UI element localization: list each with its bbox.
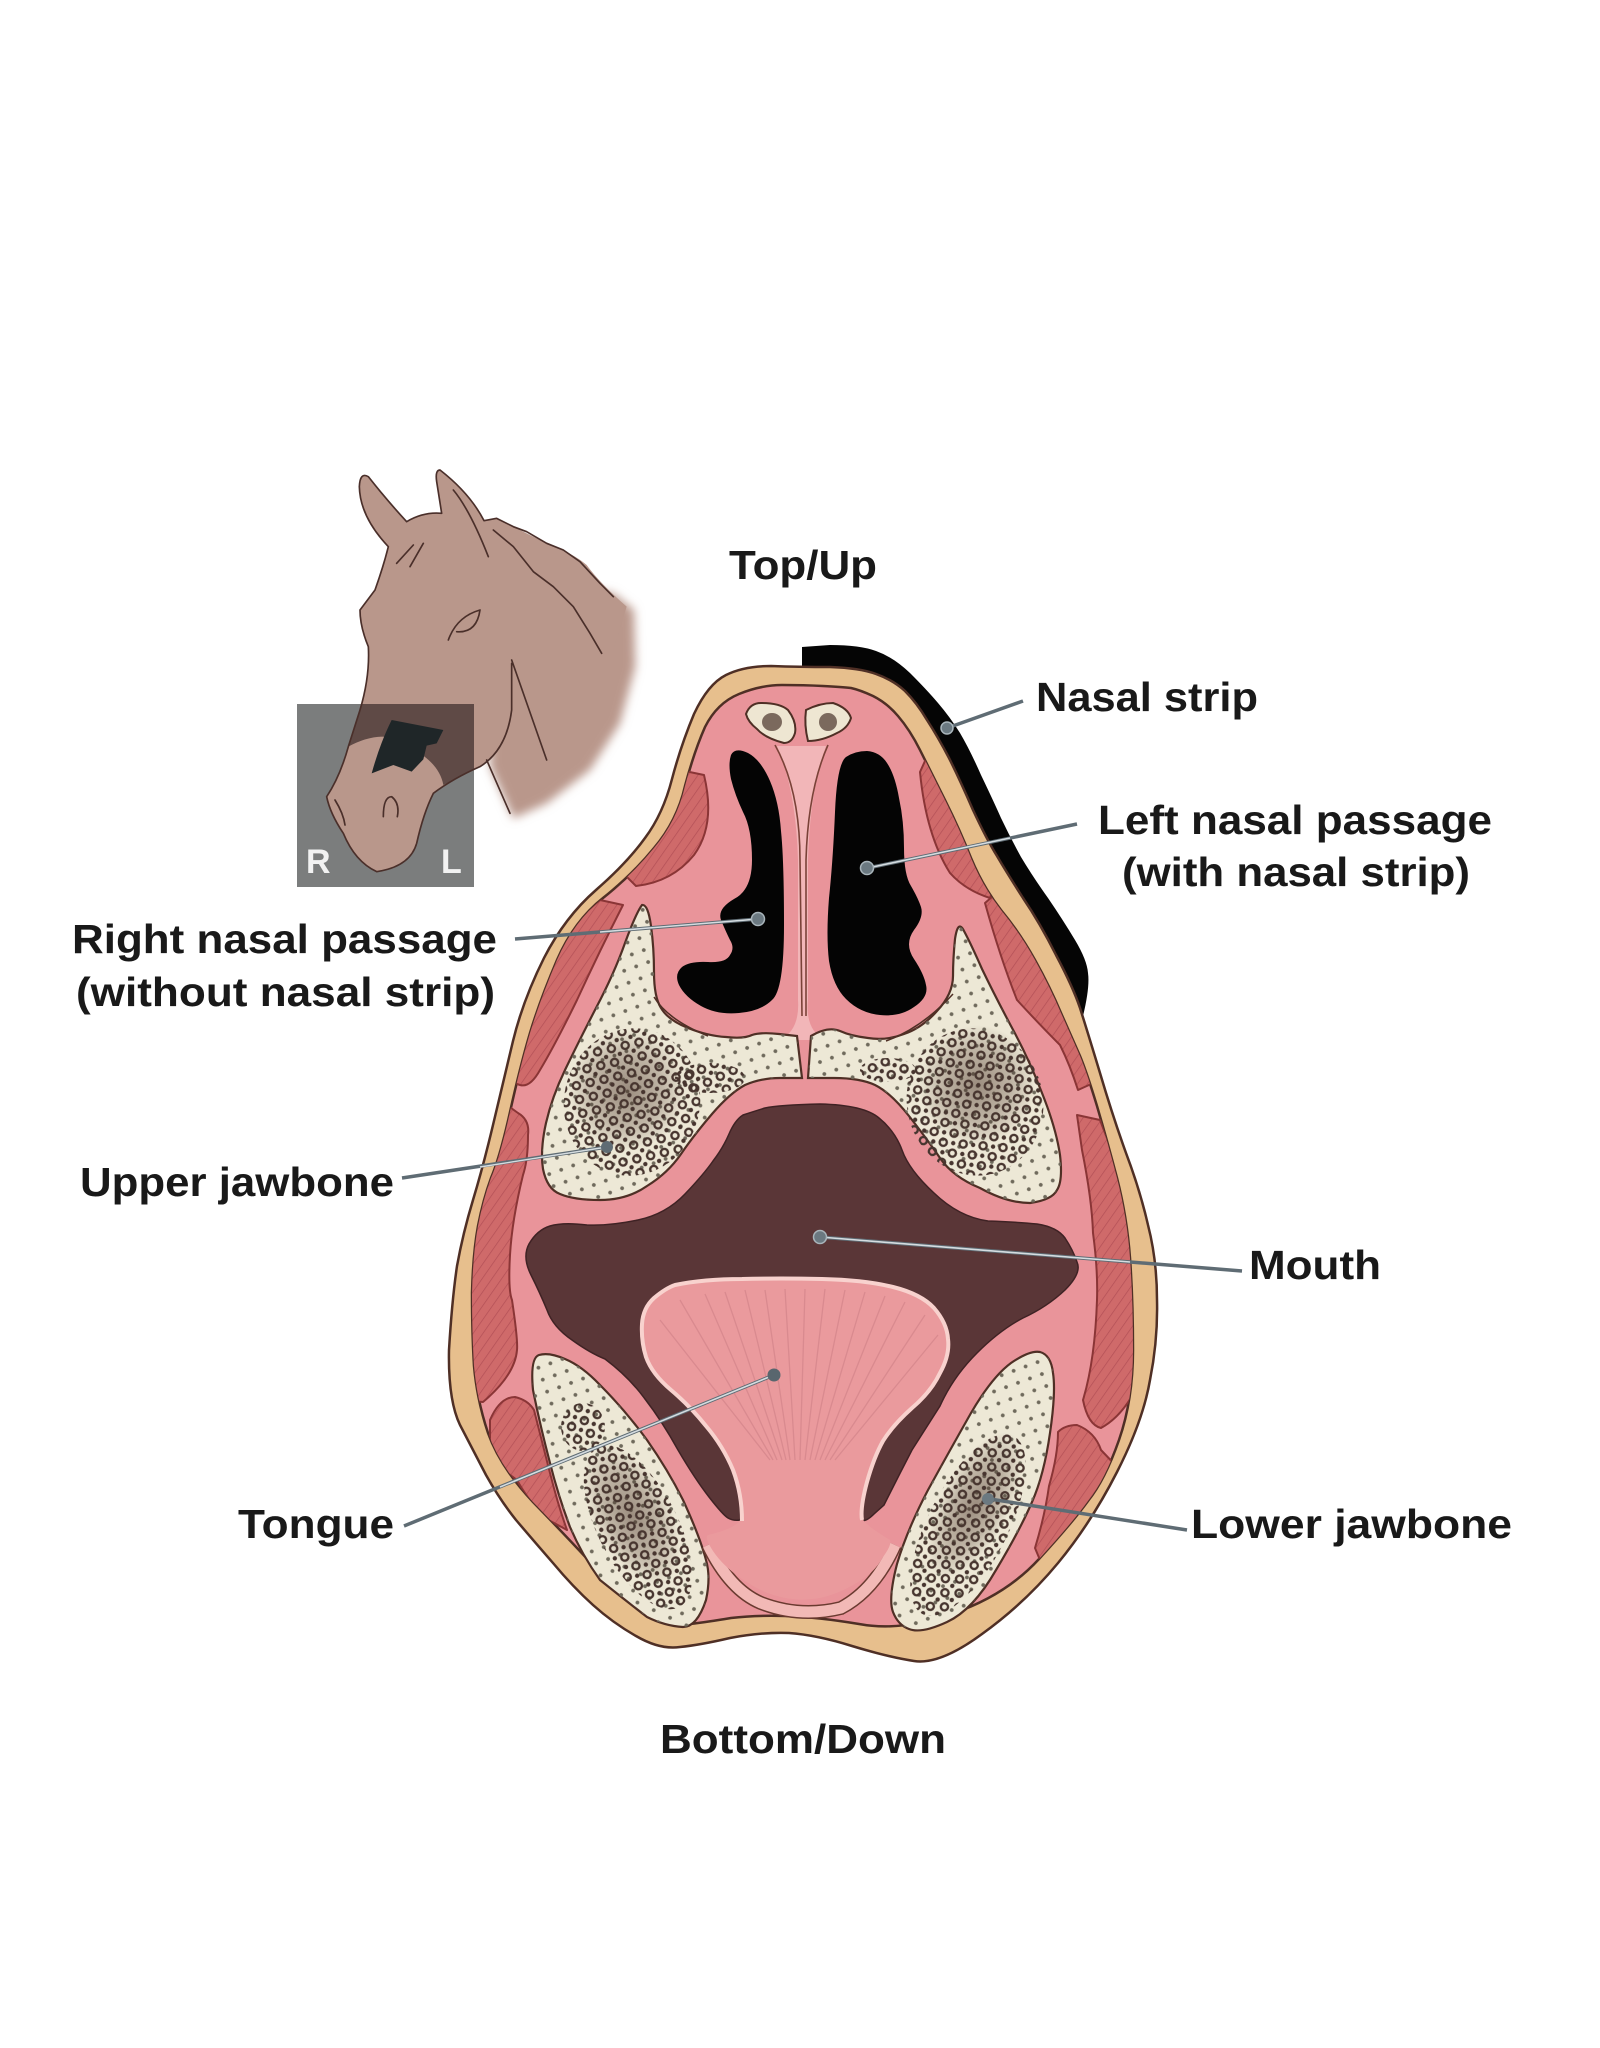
leader: lower jawbone (982, 1493, 1187, 1530)
tongue edge (642, 1278, 948, 1521)
right nasal passage (677, 750, 784, 1013)
leader: nasal strip (941, 701, 1023, 734)
label: Left nasal passage: Left nasal passage (1098, 797, 1492, 843)
illustration: horse head locator (297, 470, 635, 887)
heading: Bottom/Down: Bottom/Down (660, 1716, 946, 1762)
label: Right nasal passage: (without nasal strip) (76, 969, 495, 1015)
leader: right nasal passage (515, 912, 764, 939)
passage membrane outlines (654, 994, 953, 1041)
horse head drawing (327, 470, 635, 872)
nasal strip (802, 645, 1088, 1016)
skin (449, 666, 1157, 1661)
label: Left nasal passage (1098, 797, 1492, 895)
small nasal bones (746, 703, 851, 743)
leader: tongue (404, 1368, 780, 1526)
left nasal passage (828, 751, 926, 1015)
label: Right nasal passage (72, 916, 497, 1015)
label: Mouth: Mouth (1249, 1242, 1381, 1288)
upper jawbones (542, 905, 1061, 1203)
label R: R (306, 843, 331, 881)
label: Tongue: Tongue (238, 1501, 394, 1547)
nasal septum (777, 746, 826, 1040)
lower jawbones (532, 1352, 1054, 1632)
label: Nasal strip: Nasal strip (1036, 674, 1258, 720)
septum lines (775, 745, 828, 1016)
slice plane square (297, 704, 474, 887)
label L: L (441, 843, 462, 881)
label: Right nasal passage: Right nasal passage (72, 916, 497, 962)
diagram: head cross-section (449, 645, 1157, 1661)
leader: upper jawbone (402, 1141, 613, 1178)
mouth (526, 1104, 1078, 1521)
heading: Top/Up: Top/Up (729, 542, 877, 588)
label: Lower jawbone: Lower jawbone (1191, 1501, 1512, 1547)
tongue band (708, 1545, 895, 1612)
leader: mouth (814, 1230, 1242, 1271)
tongue (642, 1278, 948, 1600)
leader: left nasal passage (860, 824, 1077, 874)
label: Left nasal passage: (with nasal strip) (1122, 849, 1470, 895)
tongue band fill (708, 1545, 895, 1612)
flesh (472, 685, 1133, 1626)
muscles (455, 750, 1150, 1560)
label: Upper jawbone: Upper jawbone (80, 1159, 394, 1205)
tongue muscle fibres (660, 1289, 938, 1460)
